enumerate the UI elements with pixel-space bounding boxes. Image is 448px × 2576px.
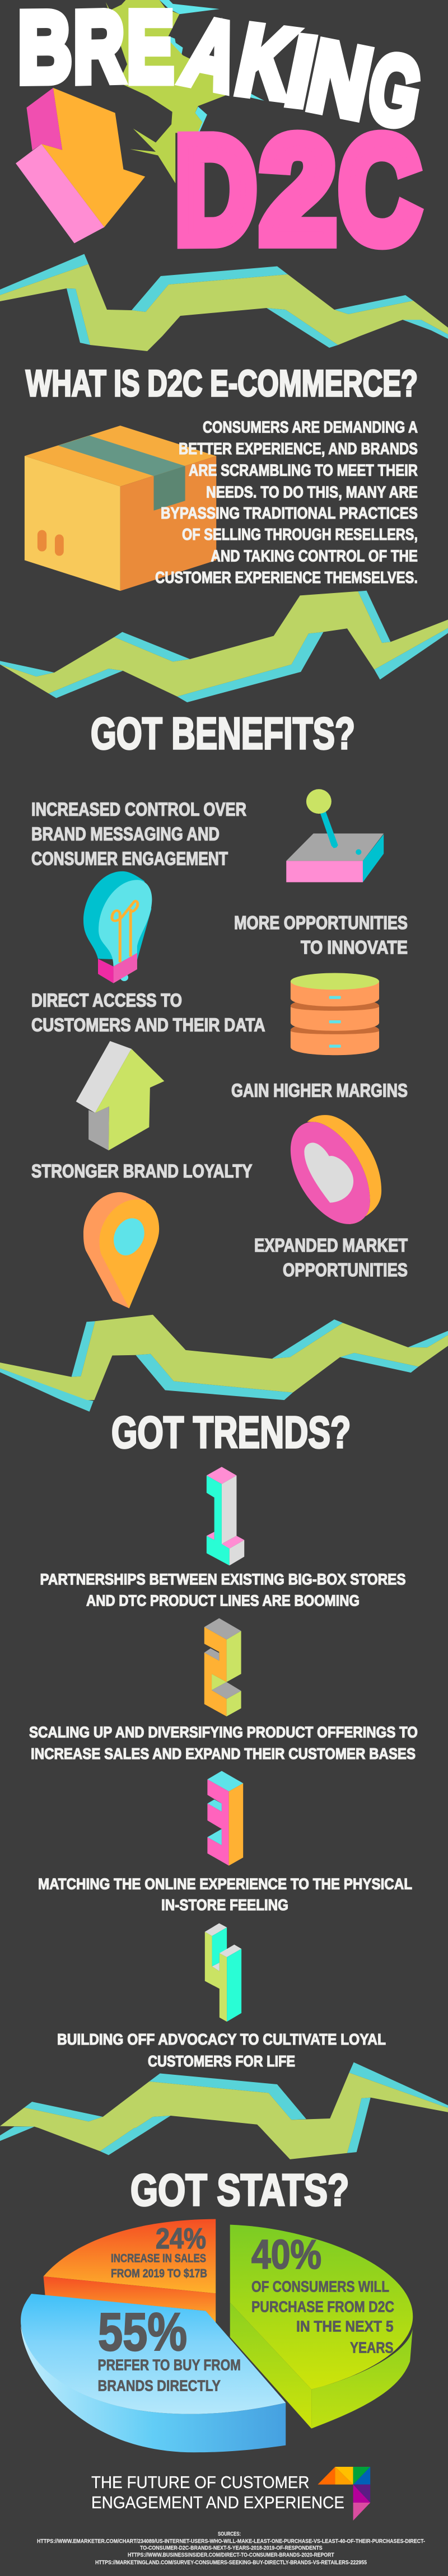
- pie slice: blue: [21, 2294, 286, 2452]
- title: BREAKING: K: [228, 4, 303, 119]
- zigzag divider 2: [0, 591, 448, 702]
- icon: isometric number 1: [207, 1467, 244, 1566]
- zigzag divider 4: [0, 2062, 448, 2159]
- stat: 40 percent: [251, 2232, 394, 2356]
- title: BREAKING: [18, 0, 428, 149]
- sources: [37, 2531, 425, 2566]
- zigzag divider 3: [0, 1315, 448, 1412]
- benefit: more opportunities: MORE OPPORTUNITIES: [234, 912, 408, 933]
- stat: 55 percent: PREFER TO BUY FROM: [97, 2356, 241, 2373]
- title: BREAKING: N: [300, 20, 380, 139]
- benefit: increased control: [31, 799, 246, 869]
- trend 3 text: [38, 1875, 412, 1914]
- icon: 3D down arrow: [16, 88, 145, 243]
- sources: SOURCES:: [218, 2531, 241, 2537]
- benefit: more opportunities: TO INNOVATE: [301, 937, 408, 958]
- benefit: gain higher margins: GAIN HIGHER MARGINS: [231, 1080, 408, 1101]
- stat: 40 percent: PURCHASE FROM D2C: [251, 2298, 394, 2315]
- benefit: increased control: BRAND MESSAGING AND: [31, 823, 220, 844]
- zigzag divider 1: [0, 254, 448, 351]
- benefit: expanded market: OPPORTUNITIES: [283, 1259, 408, 1280]
- stat: 40 percent: IN THE NEXT 5: [296, 2317, 393, 2335]
- stat: 55 percent: 55%: [98, 2302, 187, 2362]
- trend 1 text: [40, 1570, 405, 1609]
- 3D pie chart: [21, 2219, 413, 2452]
- benefit: expanded market: EXPANDED MARKET: [254, 1235, 408, 1256]
- trend 4 text: [57, 2031, 386, 2070]
- icon: cardboard box: [25, 426, 216, 591]
- stat: 40 percent: 40%: [251, 2232, 321, 2278]
- benefit: stronger brand loyalty: STRONGER BRAND LOYALTY: [31, 1160, 252, 1182]
- text block: D2C description: NEEDS. TO DO THIS, MANY ARE: [206, 483, 418, 501]
- stat: 55 percent: BRANDS DIRECTLY: [97, 2377, 221, 2395]
- icon: heart badge: [291, 1115, 381, 1224]
- title: BREAKING: A: [173, 0, 251, 111]
- logo: colour triangles: [318, 2467, 370, 2521]
- title: BREAKING: I: [278, 16, 324, 127]
- benefit: expanded market: [254, 1235, 408, 1280]
- icon: joystick: [286, 789, 384, 882]
- trend 3 text: IN-STORE FEELING: [161, 1896, 288, 1914]
- benefit: more opportunities: [234, 912, 408, 958]
- text block: D2C description: [155, 419, 418, 587]
- benefit: direct access: CUSTOMERS AND THEIR DATA: [31, 1015, 265, 1035]
- benefit: direct access: DIRECT ACCESS TO: [31, 990, 182, 1010]
- stat: 24 percent: 24%: [156, 2223, 206, 2255]
- stat: 24 percent: [111, 2223, 207, 2280]
- trend 2 text: [29, 1724, 418, 1762]
- trend 4 text: BUILDING OFF ADVOCACY TO CULTIVATE LOYAL: [57, 2031, 386, 2048]
- footer brand text: ENGAGEMENT AND EXPERIENCE: [91, 2493, 344, 2512]
- title: D2C: [175, 106, 419, 273]
- stat: 24 percent: FROM 2019 TO $17B: [111, 2267, 207, 2280]
- icon: isometric number 3: [207, 1771, 243, 1866]
- stat: 55 percent: [97, 2302, 241, 2395]
- benefit: increased control: CONSUMER ENGAGEMENT: [31, 848, 228, 869]
- footer brand text: THE FUTURE OF CUSTOMER: [91, 2472, 309, 2492]
- icon: location pin: [83, 1192, 159, 1308]
- lightning behind title: [106, 0, 264, 183]
- benefit: direct access: [31, 990, 265, 1035]
- title: BREAKING: G: [361, 32, 428, 149]
- footer brand text: [91, 2472, 344, 2512]
- sources: TO-CONSUMER-D2C-BRANDS-NEXT-5-YEARS-2018-2019-OF-RESPONDENTS: [140, 2545, 323, 2551]
- icon: light bulb: [83, 871, 152, 983]
- sources: HTTPS://WWW.BUSINESSINSIDER.COM/DIRECT-TO-CONSUMER-BRANDS-2020-REPORT: [128, 2552, 334, 2559]
- stat: 24 percent: INCREASE IN SALES: [111, 2252, 206, 2265]
- heading: got stats: GOT STATS?: [130, 2165, 349, 2215]
- icon: database: [291, 973, 379, 1055]
- icon: isometric number 4: [205, 1923, 241, 2022]
- title: D2C: 2: [260, 106, 335, 273]
- sources: HTTPS://MARKETINGLAND.COM/SURVEY-CONSUMERS-SEEKING-BUY-DIRECTLY-BRANDS-VS-RETAILERS-222955: [95, 2559, 367, 2566]
- stat: 40 percent: YEARS: [350, 2339, 393, 2356]
- heading: got trends: GOT TRENDS?: [111, 1407, 351, 1457]
- stat: 40 percent: OF CONSUMERS WILL: [251, 2278, 389, 2295]
- icon: isometric number 2: [204, 1618, 241, 1716]
- pie slice: green: [230, 2225, 413, 2429]
- trend 4 text: CUSTOMERS FOR LIFE: [148, 2052, 295, 2070]
- icon: house arrow: [76, 1041, 164, 1150]
- title: D2C: C: [339, 106, 419, 273]
- heading: got benefits: GOT BENEFITS?: [91, 708, 355, 758]
- pie slice: orange: [44, 2219, 216, 2323]
- trend 1 text: AND DTC PRODUCT LINES ARE BOOMING: [86, 1592, 360, 1609]
- benefit: increased control: INCREASED CONTROL OVER: [31, 799, 246, 820]
- title: D2C: D: [175, 106, 256, 273]
